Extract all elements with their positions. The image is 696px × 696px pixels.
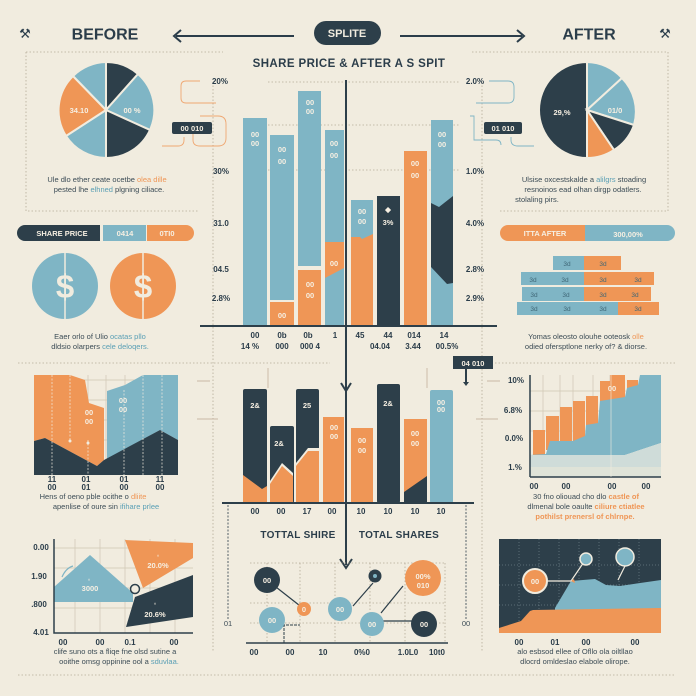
text: before pie caption: pested lhe elhned plgning ciliace. bbox=[54, 185, 164, 194]
x labels: left area chart: 00 bbox=[156, 483, 165, 492]
connector: right callout bbox=[470, 81, 534, 146]
text: stacked area caption bbox=[527, 492, 645, 521]
x labels: dark area chart: 01 bbox=[551, 638, 560, 647]
polygon chart: left: 20.0% bbox=[147, 561, 169, 570]
x axis: scatter chart: 1.0L0 bbox=[398, 648, 419, 657]
y axis labels: left bbox=[212, 77, 230, 303]
axis labels: polygon chart: .800 bbox=[31, 600, 47, 609]
x labels: left area chart: 01 bbox=[120, 475, 129, 484]
scatter chart: 00 bbox=[268, 616, 276, 625]
x labels: left area chart: 00 bbox=[48, 483, 57, 492]
pie: after: 29,% bbox=[553, 108, 571, 117]
y axis labels: right: 2.8% bbox=[466, 265, 484, 274]
stacked area chart: right bbox=[530, 375, 661, 477]
x labels: left area chart: 01 bbox=[82, 483, 91, 492]
x labels: left area chart: 00 bbox=[120, 483, 129, 492]
badge: split bbox=[314, 21, 381, 45]
bar chart: share price: 00 bbox=[330, 151, 338, 160]
text: polygon chart caption bbox=[54, 647, 179, 666]
axis labels: stacked area chart: 00 bbox=[608, 482, 617, 491]
x labels: left area chart: 11 bbox=[156, 475, 165, 484]
center arrow bbox=[340, 80, 352, 568]
stacked bars: after: 3d bbox=[599, 277, 607, 284]
bar chart: share price: 00 bbox=[251, 130, 259, 139]
pie: before: 00 % bbox=[123, 106, 141, 115]
bar chart: total shares: 2& bbox=[250, 401, 260, 410]
legend bar: share price: 0414 bbox=[117, 229, 134, 238]
x axis: share price: 00 bbox=[251, 331, 260, 340]
bar chart: share price: 00 bbox=[330, 259, 338, 268]
text: dark area chart caption: dlocrd omldeslao elabole olirope. bbox=[520, 657, 630, 666]
axis labels: stacked area chart: 1.% bbox=[508, 463, 522, 472]
connector: right callout: 01 010 bbox=[492, 124, 514, 133]
x axis: share price: 000 4 bbox=[300, 342, 321, 351]
polygon chart: left bbox=[54, 539, 193, 633]
x axis: total shares: 10 bbox=[384, 507, 393, 516]
bar chart: share price: 3% bbox=[383, 218, 394, 227]
text: coin caption bbox=[51, 332, 149, 351]
stacked bars: after bbox=[517, 256, 659, 315]
stacked bars: after: 3d bbox=[562, 292, 570, 299]
header: after: AFTER bbox=[562, 26, 616, 44]
header: after: ⚒ bbox=[659, 26, 671, 41]
bar chart: total shares: 00 bbox=[411, 439, 419, 448]
x axis: share price: 0b bbox=[277, 331, 287, 340]
bar chart: share price: ◆ bbox=[384, 205, 392, 214]
bar chart: share price: 00 bbox=[411, 171, 419, 180]
y axis labels: right: 4.0% bbox=[466, 219, 484, 228]
callout: share tag bbox=[453, 356, 493, 386]
x axis: share price: 3.44 bbox=[405, 342, 421, 351]
axis labels: stacked area chart: 0.0% bbox=[505, 434, 523, 443]
text: coin caption: Eaer orlo of Ulio ocatas pllo bbox=[54, 332, 146, 341]
text: dark area chart caption: alo esbsod ellee of Ofllo ola oiltllao bbox=[517, 647, 633, 656]
header: after bbox=[562, 26, 671, 44]
axis labels: polygon chart: 0.1 bbox=[124, 638, 136, 647]
connector: left callout bbox=[162, 81, 226, 146]
bar chart: share price: 00 bbox=[278, 157, 286, 166]
scatter chart: 00% bbox=[415, 572, 431, 581]
axis labels: polygon chart: 00 bbox=[170, 638, 179, 647]
bar chart: total shares: 00 bbox=[437, 398, 445, 407]
x axis: share price: 00.5% bbox=[436, 342, 458, 351]
x axis: share price: 014 bbox=[407, 331, 421, 340]
x labels: dark area chart: 00 bbox=[631, 638, 640, 647]
text: area chart caption: Hens of oeno pble ocithe o dliite bbox=[40, 492, 146, 501]
x axis: share price: 0b bbox=[303, 331, 313, 340]
bar chart: total shares: 00 bbox=[330, 432, 338, 441]
y axis labels: left: 30% bbox=[213, 167, 229, 176]
x axis: total shares: 00 bbox=[328, 507, 337, 516]
stacked bars: after: 3d bbox=[529, 277, 537, 284]
x axis: share price bbox=[200, 326, 497, 351]
bar chart: total shares: 00 bbox=[358, 446, 366, 455]
x axis: total shares: 10 bbox=[437, 507, 446, 516]
stacked bars: after: 3d bbox=[530, 306, 538, 313]
icon: blue dollar coin bbox=[32, 253, 98, 319]
pie: before bbox=[59, 62, 154, 158]
x axis: scatter chart: 00 bbox=[286, 648, 295, 657]
x axis: total shares bbox=[222, 503, 474, 516]
dashed guides bbox=[224, 505, 470, 628]
stacked bars: after: 3d bbox=[563, 306, 571, 313]
x axis: share price: 14 bbox=[440, 331, 449, 340]
icon: orange dollar coin: $ bbox=[134, 268, 152, 305]
x axis: total shares: 00 bbox=[251, 507, 260, 516]
x axis: share price: 1 bbox=[333, 331, 338, 340]
bar chart: total shares: 25 bbox=[303, 401, 311, 410]
text: area chart caption: apenlise of oure sin ifihare prlee bbox=[53, 502, 159, 511]
scatter chart: 010 bbox=[417, 581, 429, 590]
text: stacked bars caption: Yomas oleosto olouhe ooteosk olle bbox=[528, 332, 644, 341]
x axis: share price: 14 % bbox=[241, 342, 259, 351]
text: stacked bars caption bbox=[525, 332, 647, 351]
stacked bars: after: 3d bbox=[634, 306, 642, 313]
text: polygon chart caption: ooithe omsg oppinine ool a sduvlaa. bbox=[59, 657, 179, 666]
bar chart: total shares: 00 bbox=[437, 405, 445, 414]
axis labels: polygon chart: 00 bbox=[96, 638, 105, 647]
bar chart: total shares bbox=[243, 384, 453, 503]
x axis: scatter chart: 00 bbox=[250, 648, 259, 657]
x axis: scatter chart: 10 bbox=[319, 648, 328, 657]
bar chart: total shares: 00 bbox=[411, 429, 419, 438]
arrow: left bbox=[174, 30, 294, 42]
bar chart: share price: 00 bbox=[278, 311, 286, 320]
scatter chart bbox=[250, 560, 445, 643]
text: coin caption: dldsio olarpers cele deloqers. bbox=[51, 342, 149, 351]
text: after pie caption bbox=[515, 175, 646, 204]
header: before bbox=[19, 26, 139, 44]
dashed guides: 00 bbox=[462, 619, 470, 628]
y axis labels: right: 1.0% bbox=[466, 167, 484, 176]
heading: total share: TOTTAL SHIRE bbox=[260, 530, 336, 541]
bar chart: total shares: 00 bbox=[330, 423, 338, 432]
badge: split: SPLITE bbox=[328, 28, 366, 40]
axis labels: stacked area chart: 00 bbox=[530, 482, 539, 491]
x axis: share price: 45 bbox=[356, 331, 365, 340]
text: dark area chart caption bbox=[517, 647, 633, 666]
bar chart: total shares: 2& bbox=[383, 399, 393, 408]
bar chart: share price: 00 bbox=[306, 107, 314, 116]
pie: before: 34.10 bbox=[70, 106, 88, 115]
x axis: total shares: 17 bbox=[303, 507, 312, 516]
pie: after bbox=[539, 62, 636, 158]
axis labels: stacked area chart: 6.8% bbox=[504, 406, 522, 415]
x labels: left area chart: 01 bbox=[82, 475, 91, 484]
text: before pie caption bbox=[47, 175, 167, 194]
polygon chart: left: 3000 bbox=[82, 584, 98, 593]
y axis labels: left: 04.5 bbox=[213, 265, 229, 274]
bar chart: share price bbox=[243, 91, 453, 326]
x axis: total shares: 10 bbox=[357, 507, 366, 516]
y axis labels: right: 2.0% bbox=[466, 77, 484, 86]
text: after pie caption: stolaling pirs. bbox=[515, 195, 559, 204]
stacked bars: after: 3d bbox=[634, 277, 642, 284]
stacked area chart: right: 00 bbox=[608, 384, 616, 393]
text: before pie caption: Ule dlo ether ceate ocetbe olea dille bbox=[47, 175, 167, 184]
area chart: left: 00 bbox=[119, 405, 127, 414]
x labels: left area chart: 11 bbox=[48, 475, 57, 484]
dashed guides: 01 bbox=[224, 619, 232, 628]
header: before: ⚒ bbox=[19, 26, 31, 41]
stacked bars: after: 3d bbox=[561, 277, 569, 284]
bar chart: share price: 00 bbox=[438, 130, 446, 139]
bar chart: total shares: 00 bbox=[358, 436, 366, 445]
area chart: left: 00 bbox=[85, 417, 93, 426]
legend bar: after: ITTA AFTER bbox=[524, 229, 567, 238]
y axis labels: right bbox=[466, 77, 484, 303]
axis labels: polygon chart: 4.01 bbox=[33, 628, 49, 637]
x axis: total shares: 10 bbox=[411, 507, 420, 516]
stacked bars: after: 3d bbox=[599, 292, 607, 299]
heading: total shares: TOTAL SHARES bbox=[359, 530, 439, 541]
x labels: dark area chart: 00 bbox=[582, 638, 591, 647]
stacked bars: after: 3d bbox=[631, 292, 639, 299]
connector: left callout: 00 010 bbox=[181, 124, 203, 133]
axis labels: polygon chart bbox=[31, 543, 179, 647]
arrow: right bbox=[400, 30, 524, 42]
polygon chart: left: ◦ bbox=[157, 551, 160, 560]
y axis labels: left: 2.8% bbox=[212, 294, 230, 303]
scatter chart: 00 bbox=[336, 605, 344, 614]
bar chart: share price: 00 bbox=[306, 280, 314, 289]
area chart: left: 00 bbox=[85, 408, 93, 417]
scatter chart: 00 bbox=[368, 620, 376, 629]
x labels: left area chart bbox=[48, 475, 165, 492]
stacked bars: after: 3d bbox=[599, 261, 607, 268]
axis labels: stacked area chart bbox=[504, 376, 651, 491]
x axis: share price: 000 bbox=[275, 342, 289, 351]
text: after pie caption: Ulsise oxcestskalde a alilgrs stoading bbox=[522, 175, 646, 184]
x axis: scatter chart bbox=[246, 643, 448, 657]
callout: share tag: 04 010 bbox=[462, 359, 484, 368]
text: stacked area caption: 30 fno oliouad cho dlo castle of bbox=[533, 492, 639, 501]
text: after pie caption: resnoinos ead olhan dirgp odatlers. bbox=[524, 185, 642, 194]
bar chart: share price: 00 bbox=[358, 217, 366, 226]
bar chart: share price: 00 bbox=[330, 139, 338, 148]
pie: after: 01/0 bbox=[608, 106, 622, 115]
axis labels: stacked area chart: 00 bbox=[642, 482, 651, 491]
x axis: scatter chart: 0%0 bbox=[354, 648, 371, 657]
x axis: share price: 44 bbox=[384, 331, 393, 340]
dark area chart: right: 00 bbox=[531, 577, 539, 586]
bar chart: share price: 00 bbox=[358, 207, 366, 216]
bar chart: share price: 00 bbox=[278, 145, 286, 154]
bar chart: total shares: 2& bbox=[274, 439, 284, 448]
area chart: left: 00 bbox=[119, 396, 127, 405]
bar chart: share price: 00 bbox=[438, 140, 446, 149]
bar chart: share price: 00 bbox=[251, 139, 259, 148]
x axis: share price: 04.04 bbox=[370, 342, 391, 351]
bar chart: share price: 00 bbox=[306, 291, 314, 300]
scatter chart: 00 bbox=[263, 576, 271, 585]
stacked bars: after: 3d bbox=[530, 292, 538, 299]
scatter chart: 00 bbox=[420, 620, 428, 629]
area chart: left bbox=[34, 375, 178, 475]
chart title: SHARE PRICE & AFTER A S SPIT bbox=[253, 58, 445, 70]
legend bar: share price: 0TI0 bbox=[159, 229, 175, 238]
legend bar: share price bbox=[17, 225, 194, 241]
header: before: BEFORE bbox=[72, 26, 139, 44]
y axis labels: left: 31.0 bbox=[213, 219, 229, 228]
x axis: scatter chart: 10t0 bbox=[429, 648, 446, 657]
icon: orange dollar coin bbox=[110, 253, 176, 319]
axis labels: polygon chart: 1.90 bbox=[31, 572, 47, 581]
text: stacked area caption: pothilst prenersl of chlrnpe. bbox=[535, 512, 635, 521]
legend bar: after: 300,00% bbox=[613, 230, 643, 239]
legend bar: share price: SHARE PRICE bbox=[36, 229, 88, 238]
text: stacked bars caption: odied ofersptlone nerky of? & diorse. bbox=[525, 342, 647, 351]
axis labels: stacked area chart: 10% bbox=[508, 376, 524, 385]
x labels: dark area chart bbox=[515, 638, 640, 647]
axis labels: polygon chart: 00 bbox=[59, 638, 68, 647]
x labels: dark area chart: 00 bbox=[515, 638, 524, 647]
y axis labels: left: 20% bbox=[212, 77, 228, 86]
dark area chart: right bbox=[499, 539, 661, 633]
polygon chart: left: ◦ bbox=[88, 575, 91, 584]
stacked bars: after: 3d bbox=[599, 306, 607, 313]
text: stacked area caption: dlmenal bole oaulte ciliure ctiatlee bbox=[527, 502, 645, 511]
x axis: total shares: 00 bbox=[277, 507, 286, 516]
polygon chart: left: 20.6% bbox=[144, 610, 166, 619]
y axis labels: right: 2.9% bbox=[466, 294, 484, 303]
text: area chart caption bbox=[40, 492, 159, 511]
axis labels: stacked area chart: 00 bbox=[562, 482, 571, 491]
bar chart: share price: 00 bbox=[306, 98, 314, 107]
scatter chart: 0 bbox=[302, 605, 306, 614]
text: polygon chart caption: clife suno ots a fliqe fne olsd sutine a bbox=[54, 647, 177, 656]
stacked bars: after: 3d bbox=[563, 261, 571, 268]
icon: blue dollar coin: $ bbox=[56, 268, 74, 305]
polygon chart: left: ◦ bbox=[154, 599, 157, 608]
legend bar: after bbox=[500, 225, 675, 241]
bar chart: share price: 00 bbox=[411, 159, 419, 168]
axis labels: polygon chart: 0.00 bbox=[33, 543, 49, 552]
